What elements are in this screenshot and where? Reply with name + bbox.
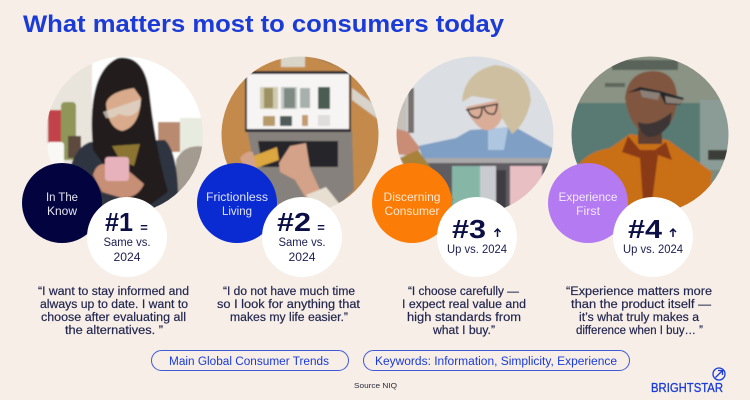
rank: #3 <box>437 197 517 277</box>
quote 3: I expect real value and <box>402 299 526 311</box>
logo: Brightstar: BRIGHTSTAR <box>651 381 723 395</box>
title: What matters most to consumers today <box>23 11 504 38</box>
quote 4 <box>566 286 712 337</box>
rank: #2: = <box>317 220 325 235</box>
logo: Brightstar <box>651 368 725 395</box>
badge: Discerning Consumer: Consumer <box>384 206 440 218</box>
rank: #1 <box>87 197 167 277</box>
quote 3: “I choose carefully — <box>408 286 520 298</box>
source note: Source NIQ <box>354 381 397 390</box>
badge: Frictionless Living: Frictionless <box>206 192 268 204</box>
badge: Discerning Consumer <box>372 163 452 243</box>
icon: up arrow <box>670 229 676 237</box>
pill: Keywords: Keywords: Information, Simplicity, Experience <box>375 356 617 368</box>
rank: #1: 2024 <box>114 252 141 264</box>
rank: #2 <box>262 197 342 277</box>
photo: woman with phone <box>44 55 206 217</box>
pill: Keywords <box>364 350 630 370</box>
quote 2 <box>217 286 361 324</box>
quote 3: what I buy.” <box>432 325 495 337</box>
badge: Discerning Consumer: Discerning <box>384 192 440 204</box>
photo: man in orange shirt <box>570 55 732 217</box>
badge: Experience First: First <box>576 206 601 218</box>
badge: Frictionless Living: Living <box>222 206 252 218</box>
badge: In The Know: In The <box>46 192 78 204</box>
rank: #3: Up vs. 2024 <box>447 244 508 256</box>
rank: #3: #3 <box>452 214 486 244</box>
rank: #2: 2024 <box>288 252 316 264</box>
rank: #4: Up vs. 2024 <box>623 244 684 256</box>
badge: In The Know <box>22 163 102 243</box>
quote 2: so I look for anything that <box>217 299 361 311</box>
rank: #1: Same vs. <box>104 237 150 249</box>
photo: laptop shopping <box>220 55 382 217</box>
quote 2: makes my life easier.” <box>230 312 348 324</box>
quote 1: “I want to stay informed and <box>38 286 189 298</box>
pill: Main Global Consumer Trends: Main Global Consumer Trends <box>169 356 329 368</box>
quote 1 <box>38 286 189 337</box>
quote 1: choose after evaluating all <box>41 312 186 324</box>
badge: Experience First <box>548 163 628 243</box>
quote 4: than the product itself — <box>571 299 712 311</box>
rank: #1: = <box>140 220 148 235</box>
icon: up arrow <box>494 229 500 237</box>
badge: In The Know: Know <box>47 206 78 218</box>
badge: Experience First: Experience <box>558 192 618 204</box>
quote 4: it’s what truly makes a <box>579 312 700 324</box>
rank: #4: #4 <box>628 214 663 244</box>
photo: woman choosing clothes <box>396 56 554 208</box>
quote 3: high standards from <box>407 312 521 324</box>
quote 3 <box>402 286 526 337</box>
quote 1: always up to date. I want to <box>40 299 188 311</box>
quote 2: “I do not have much time <box>223 286 355 298</box>
rank: #2: #2 <box>277 207 311 237</box>
rank: #2: Same vs. <box>278 237 326 249</box>
quote 4: difference when I buy… ” <box>576 325 703 337</box>
quote 1: the alternatives. ” <box>65 325 163 337</box>
rank: #4 <box>613 197 693 277</box>
quote 4: “Experience matters more <box>566 286 712 298</box>
badge: Frictionless Living <box>197 163 277 243</box>
pill: Main Global Consumer Trends <box>152 350 348 370</box>
rank: #1: #1 <box>105 207 133 237</box>
